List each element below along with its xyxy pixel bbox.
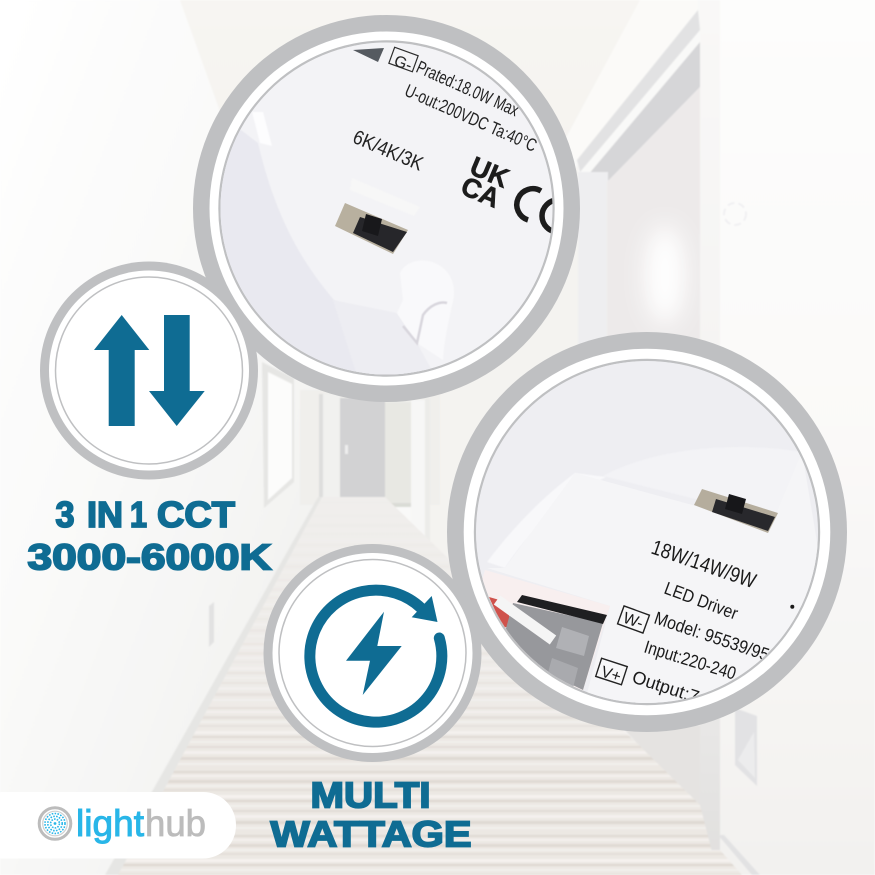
heading: 3 in 1 CCT: CCT — [157, 494, 235, 535]
far corridor walls — [300, 390, 440, 505]
far floor fade — [170, 497, 640, 770]
lower casing edge — [416, 368, 430, 372]
label marker — [353, 48, 384, 62]
icon: circular arrow — [310, 590, 442, 722]
label: wattage options: 18W/14W/9W — [648, 536, 759, 593]
panel: 3 in 1 CCT badge — [40, 262, 258, 480]
label: W- box — [618, 606, 649, 633]
switch opening — [335, 203, 408, 254]
casing highlight strip — [253, 112, 271, 145]
label: V+: V+ — [599, 664, 623, 686]
far floor and carpet — [113, 497, 718, 875]
notch shadow — [403, 302, 447, 343]
icon: logo rings — [39, 808, 71, 839]
terminal lever two — [548, 658, 578, 686]
door frame shadow — [588, 42, 700, 182]
panel: top photo circle, colour temperature switch — [193, 15, 580, 402]
far left frame — [319, 394, 323, 497]
door reflection — [645, 225, 685, 325]
switch knob — [362, 214, 382, 236]
heading: 3 in 1 CCT — [56, 494, 235, 535]
lower wall under door frame — [620, 725, 700, 812]
red wire — [489, 597, 510, 628]
photo: driver casing with terminals — [470, 360, 830, 720]
right wall — [720, 0, 875, 875]
switch knob — [725, 494, 746, 514]
panel: multi wattage badge — [264, 544, 482, 762]
icon: lightning bolt — [346, 612, 402, 695]
terminal compartment — [482, 570, 610, 690]
far right post — [425, 398, 430, 588]
label: G-: G- — [392, 53, 414, 75]
left corridor wall window pane — [268, 372, 292, 500]
photo: driver casing with switch — [220, 42, 552, 374]
right wall plate highlight — [738, 732, 755, 778]
far door — [340, 398, 385, 497]
door post — [700, 0, 720, 852]
mark: C — [517, 189, 541, 220]
label: model: Model: 95539/95 — [652, 608, 772, 665]
right wall thermostat — [724, 203, 746, 225]
door recess — [607, 87, 700, 345]
ceiling — [180, 0, 640, 390]
heading: 3 in 1 CCT: IN — [87, 494, 123, 535]
far left recess — [320, 394, 340, 497]
heading: 3 in 1 CCT: 3 — [56, 494, 74, 535]
grey terminal block — [500, 603, 603, 690]
label: G- box — [389, 47, 418, 72]
mark: UK: UK — [466, 151, 514, 194]
mark: CA: CA — [457, 171, 504, 214]
label: W-: W- — [621, 610, 645, 633]
far right wall skirting — [385, 503, 411, 507]
far right door — [411, 400, 429, 550]
logo text: light: light — [76, 803, 145, 844]
icon: up arrow — [94, 315, 149, 426]
heading: colour temperature range: 3000-6000K — [28, 536, 272, 578]
white wire — [497, 600, 553, 640]
left wall outlet — [209, 602, 214, 647]
far door handle — [345, 445, 348, 454]
casing dome — [798, 452, 800, 456]
heading: wattage: WATTAGE — [270, 814, 472, 854]
label: input: Input:220-240 — [642, 637, 739, 684]
switch slider — [712, 499, 775, 531]
heading: multi: MULTI — [310, 774, 430, 816]
casing left side — [220, 130, 355, 372]
ceiling bright strip — [560, 0, 697, 160]
icon: down arrow — [149, 315, 205, 426]
terminal lever one — [556, 627, 589, 656]
label: LED Driver: LED Driver — [662, 578, 741, 624]
left wall — [0, 0, 330, 875]
casing plate — [588, 457, 818, 703]
panel: right photo circle, wattage switch — [447, 332, 847, 732]
far right wall piece — [385, 402, 411, 505]
label: rated power: Prated:18.0W Max — [413, 57, 522, 120]
mark: E — [539, 198, 552, 234]
label: colour temperature: 6K/4K/3K — [350, 126, 427, 176]
door frame moulding — [577, 10, 700, 172]
switch opening — [694, 489, 778, 533]
label: V+ box — [596, 658, 627, 685]
terminal shadow strip — [517, 595, 607, 624]
logo: lighthub — [0, 792, 236, 858]
left baseboard — [105, 497, 322, 875]
switch slider — [353, 217, 407, 252]
right wall plate — [735, 708, 757, 786]
notch — [397, 260, 454, 360]
label: output: Output:7 — [630, 667, 702, 707]
logo text: hub: hub — [145, 803, 206, 844]
label: dot — [790, 605, 794, 609]
carpet beside post — [700, 850, 742, 875]
right side corridor wall — [430, 165, 578, 560]
heading: 3 in 1 CCT: 1 — [130, 494, 147, 535]
left corridor wall window — [262, 362, 294, 508]
switch surround highlight — [350, 178, 420, 216]
label: output voltage: U-out:200VDC Ta:40°C — [402, 80, 540, 156]
right baseboard — [718, 835, 760, 875]
casing flap — [487, 473, 606, 568]
door frame jamb — [578, 172, 608, 362]
